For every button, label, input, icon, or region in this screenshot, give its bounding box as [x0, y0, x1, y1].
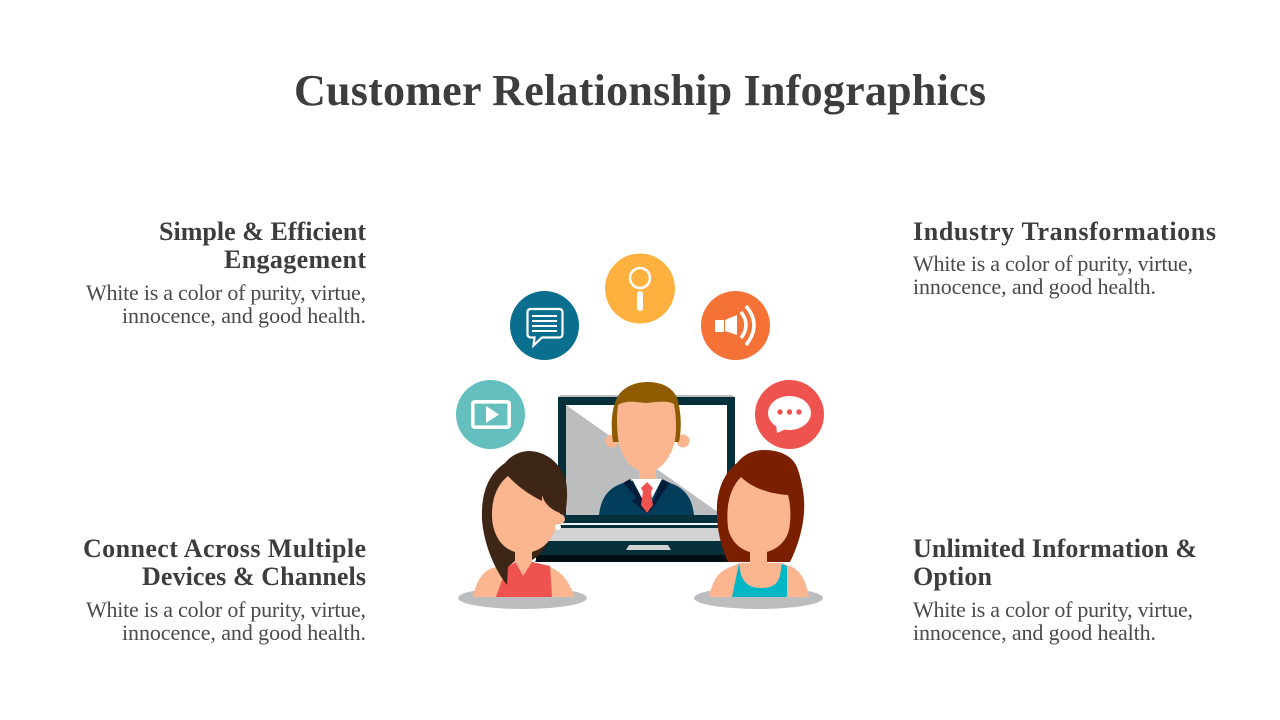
text block: unlimited information — [913, 597, 1193, 645]
heading: connect across devices: Devices & Channels — [142, 562, 366, 591]
text block: simple and efficient engagement: innocence, and good health. — [122, 303, 366, 328]
panel: simple and efficient engagement — [86, 217, 366, 328]
icon: magnifier — [605, 254, 675, 324]
icon: message list — [510, 291, 579, 360]
panel: connect across devices — [83, 534, 366, 645]
person: man on screen — [599, 382, 694, 515]
laptop — [535, 395, 735, 562]
panel: industry transformations — [913, 217, 1216, 299]
icon: video play — [456, 380, 525, 449]
heading: industry transformations: Industry Transformations — [913, 217, 1216, 246]
icon: speaker — [701, 291, 770, 360]
heading: unlimited information — [913, 534, 1197, 591]
heading: unlimited information: Unlimited Information & — [913, 534, 1197, 563]
text block: industry transformations — [913, 251, 1193, 299]
heading: simple and efficient engagement: Simple & Efficient — [159, 217, 366, 246]
text block: connect across devices: innocence, and good health. — [122, 620, 366, 645]
panel: unlimited information — [913, 534, 1197, 645]
text block: simple and efficient engagement — [86, 280, 366, 328]
text block: industry transformations: White is a color of purity, virtue, — [913, 251, 1193, 276]
title: Customer Relationship Infographics — [294, 66, 986, 115]
text block: simple and efficient engagement: White is a color of purity, virtue, — [86, 280, 366, 305]
text block: connect across devices: White is a color of purity, virtue, — [86, 597, 366, 622]
person: woman left with headset — [458, 451, 587, 609]
text block: industry transformations: innocence, and good health. — [913, 274, 1156, 299]
heading: simple and efficient engagement — [159, 217, 366, 274]
icon: speech bubble — [755, 380, 824, 449]
heading: connect across devices — [83, 534, 366, 591]
heading: unlimited information: Option — [913, 562, 993, 591]
heading: simple and efficient engagement: Engagement — [224, 245, 366, 274]
text block: connect across devices — [86, 597, 366, 645]
text block: unlimited information: White is a color of purity, virtue, — [913, 597, 1193, 622]
text block: unlimited information: innocence, and good health. — [913, 620, 1156, 645]
heading: connect across devices: Connect Across Multiple — [83, 534, 366, 563]
person: woman right — [694, 450, 823, 609]
